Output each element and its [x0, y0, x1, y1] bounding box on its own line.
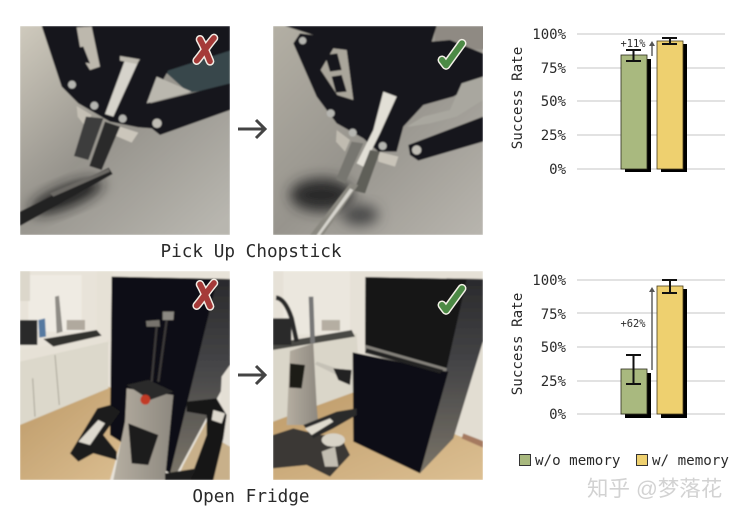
bar: w/ memory [657, 41, 687, 172]
photo: chopstick failure [20, 26, 230, 235]
bar: w/o memory [621, 55, 651, 172]
icon: green check [442, 43, 462, 65]
bar chart: chopstick success rate: 0% [549, 162, 567, 178]
annotation: +62% [620, 287, 655, 370]
legend: w/ memory [652, 453, 729, 469]
bar chart: chopstick success rate: 25% [541, 128, 567, 144]
icon: red cross [197, 38, 214, 61]
bar: w/o memory [621, 369, 651, 418]
bar chart: fridge success rate: Success Rate [510, 293, 526, 395]
icon: red cross [197, 283, 214, 306]
annotation: +62%: +62% [620, 318, 646, 330]
caption: Open Fridge: Open Fridge [192, 487, 310, 507]
photo: chopstick success [273, 26, 485, 235]
bar chart: fridge success rate: 25% [541, 374, 567, 390]
bar chart: fridge success rate: 0% [549, 407, 567, 423]
bar chart: chopstick success rate: Success Rate [510, 47, 526, 149]
bar chart: fridge success rate: 50% [541, 340, 567, 356]
arrow: bottom row [238, 366, 265, 384]
caption: Pick Up Chopstick: Pick Up Chopstick [160, 242, 342, 262]
bar chart: fridge success rate: 75% [541, 307, 567, 323]
bar: w/ memory [657, 286, 687, 418]
annotation: +11%: +11% [620, 38, 646, 50]
icon: green check [442, 288, 462, 310]
bar chart: chopstick success rate [510, 27, 725, 178]
bar chart: chopstick success rate: 75% [541, 61, 567, 77]
arrow: top row [238, 120, 265, 138]
photo: fridge failure [20, 271, 230, 480]
legend: w/o memory [535, 453, 620, 469]
bar chart: fridge success rate [510, 273, 725, 423]
photo: fridge success [273, 271, 483, 480]
bar chart: chopstick success rate: 50% [541, 94, 567, 110]
bar chart: chopstick success rate: 100% [532, 27, 567, 43]
watermark: 知乎 @梦落花 [587, 477, 722, 501]
legend [520, 453, 729, 469]
annotation: +11% [620, 38, 655, 56]
bar chart: fridge success rate: 100% [532, 273, 567, 289]
